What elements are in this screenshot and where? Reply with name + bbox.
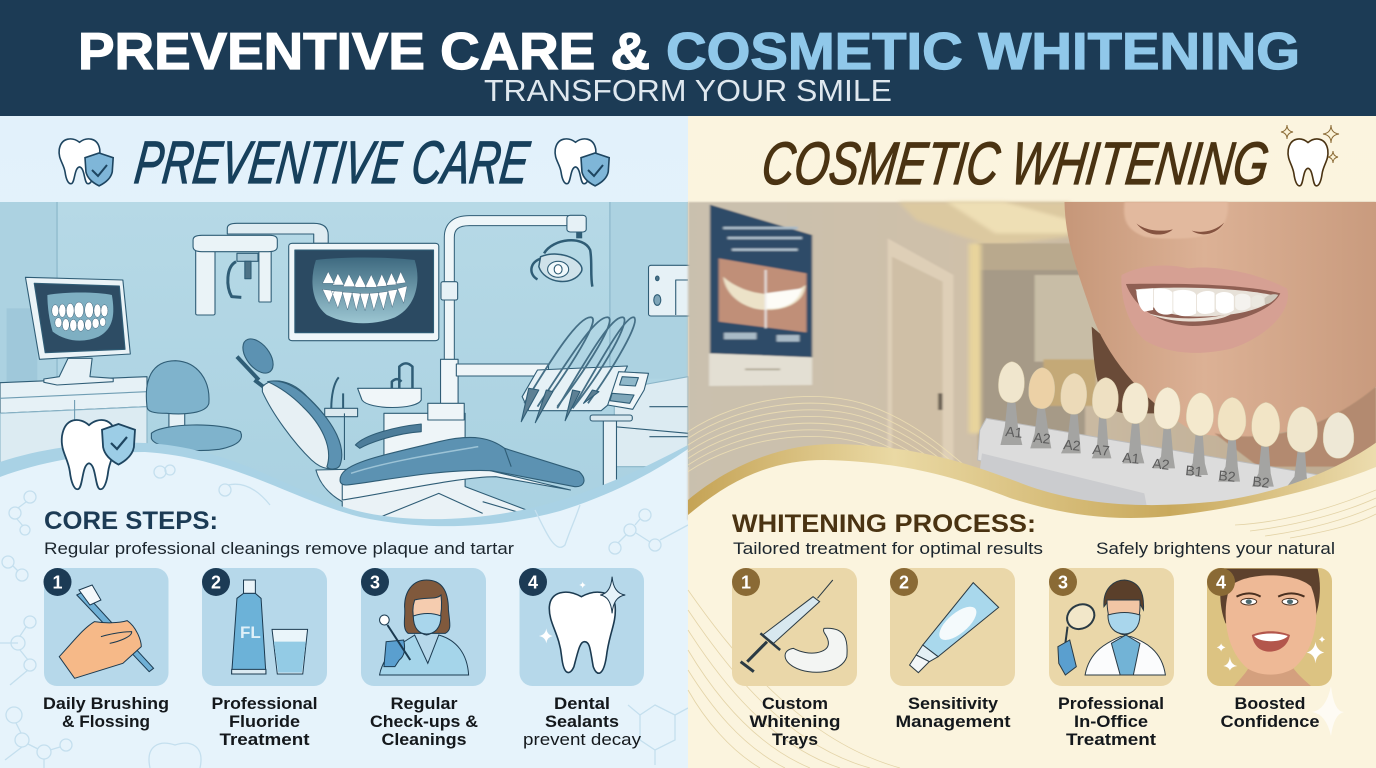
icon: smiling woman xyxy=(1217,569,1325,686)
label: Sensitivity xyxy=(908,694,999,713)
shade guide labels: A2 xyxy=(1152,455,1171,473)
text: whitening intro right: Safely brightens your natural xyxy=(1096,539,1335,558)
label: Whitening xyxy=(750,712,840,731)
shade guide labels: A1 xyxy=(1122,449,1141,467)
arm and delivery tray xyxy=(441,317,649,493)
badge 4: 4 xyxy=(1216,572,1226,592)
label xyxy=(370,694,478,749)
icon: toothbrush and hand xyxy=(59,585,154,678)
panoramic x-ray unit xyxy=(193,223,328,315)
icon: tooth with shield on scene xyxy=(62,420,135,489)
badge 4: 4 xyxy=(528,572,538,592)
monitor with dental scan xyxy=(25,277,130,385)
badge 1 xyxy=(44,568,72,596)
label: Boosted xyxy=(1234,694,1306,713)
shade guide labels: A7 xyxy=(1092,441,1111,459)
badge 3 xyxy=(361,568,389,596)
label: Treatment xyxy=(1066,730,1156,749)
badge 4 xyxy=(1207,568,1235,596)
badge 3: 3 xyxy=(370,572,380,592)
photo: whitening clinic and smile xyxy=(688,202,1376,520)
shade guide labels: A1 xyxy=(1005,423,1024,441)
lamp arm xyxy=(441,215,592,363)
title: PREVENTIVE CARE & xyxy=(78,23,650,81)
clinic background xyxy=(688,202,1376,520)
step 3: in-office xyxy=(1049,568,1174,749)
decorative gold lines: whitening xyxy=(688,490,1376,768)
badge 4 xyxy=(519,568,547,596)
panel: preventive care background xyxy=(0,116,688,768)
dental chair xyxy=(237,335,584,530)
nose xyxy=(1124,202,1228,239)
label xyxy=(1220,694,1320,731)
title xyxy=(78,23,1300,81)
badge 2 xyxy=(890,568,918,596)
gold wave band xyxy=(688,443,1376,520)
badge 2: 2 xyxy=(211,572,221,592)
sparkle watermark xyxy=(1312,686,1344,736)
lower panel wave: preventive xyxy=(0,449,688,768)
header bar xyxy=(0,0,1376,116)
badge 3 xyxy=(1049,568,1077,596)
icon: tooth with shield, left xyxy=(59,139,113,186)
label xyxy=(896,694,1011,731)
shade guide labels: B1 xyxy=(1185,462,1204,480)
illustration: dental operatory xyxy=(0,202,692,533)
badge 2: 2 xyxy=(899,572,909,592)
shade guide labels xyxy=(1005,423,1271,491)
step 3: check-ups xyxy=(361,568,486,749)
step 4: confidence xyxy=(1207,568,1332,731)
panel: cosmetic whitening background xyxy=(688,116,1376,768)
icon: dentist with light xyxy=(1058,580,1165,675)
label: prevent decay xyxy=(523,730,642,749)
label: Regular xyxy=(390,694,458,713)
stool xyxy=(146,361,241,451)
icon: fluoride tube and glass xyxy=(232,580,308,674)
step 1: trays xyxy=(732,568,857,749)
label: Daily Brushing xyxy=(43,694,169,713)
label: Confidence xyxy=(1220,712,1320,731)
subtitle: TRANSFORM YOUR SMILE xyxy=(484,73,892,108)
icon: sensitivity gel tube xyxy=(910,583,999,673)
label xyxy=(750,694,840,749)
shade guide labels: B2 xyxy=(1252,473,1271,491)
label: Dental xyxy=(554,694,610,713)
label: Check-ups & xyxy=(370,712,478,731)
label: & Flossing xyxy=(62,712,150,731)
text: whitening intro left: Tailored treatment for optimal results xyxy=(733,539,1043,558)
label: Professional xyxy=(212,694,318,713)
icon: sparkling tooth xyxy=(539,577,625,673)
label: Management xyxy=(896,712,1011,731)
label: Professional xyxy=(1058,694,1164,713)
heading: whitening process: WHITENING PROCESS: xyxy=(732,510,1036,538)
shade guide labels: A2 xyxy=(1033,429,1052,447)
icon: dentist with mirror xyxy=(380,580,469,675)
label xyxy=(43,694,169,731)
wave band: preventive xyxy=(0,443,688,768)
decorative gold arcs over photo xyxy=(688,396,978,517)
heading: core steps: CORE STEPS: xyxy=(44,507,218,535)
label xyxy=(212,694,318,749)
title: COSMETIC WHITENING xyxy=(666,23,1300,81)
step 1: daily brushing xyxy=(43,568,169,731)
badge 1: 1 xyxy=(52,572,63,592)
shade guide xyxy=(978,362,1354,520)
badge 3: 3 xyxy=(1058,572,1068,592)
water unit xyxy=(325,363,465,467)
step 2: fluoride xyxy=(202,568,327,749)
heading: preventive care: PREVENTIVE CARE xyxy=(131,128,533,196)
step 4: sealants xyxy=(519,568,644,749)
label xyxy=(1058,694,1164,749)
text: core steps intro: Regular professional cleanings remove plaque and tartar xyxy=(44,539,514,558)
badge 1 xyxy=(732,568,760,596)
icon: tooth with shield, right xyxy=(555,139,609,186)
badge 2 xyxy=(202,568,230,596)
step 2: sensitivity xyxy=(890,568,1015,731)
label: Sealants xyxy=(545,712,619,731)
hair xyxy=(1092,327,1171,413)
label: Cleanings xyxy=(382,730,466,749)
smile xyxy=(1121,265,1288,353)
icon: syringe and tray xyxy=(741,580,847,672)
x-ray monitor xyxy=(289,243,439,341)
label: In-Office xyxy=(1074,712,1148,731)
decorative molecules: preventive xyxy=(0,465,688,768)
label: Custom xyxy=(762,694,828,713)
wall dispenser xyxy=(649,265,692,316)
label: Fluoride xyxy=(229,712,300,731)
icon: sparkling tooth xyxy=(1281,125,1339,186)
label: Trays xyxy=(772,730,818,749)
icon: fluoride tube and glass: FL xyxy=(240,623,261,642)
label xyxy=(523,694,642,749)
lower panel wave: whitening xyxy=(688,460,1376,768)
shade guide labels: B2 xyxy=(1218,467,1237,485)
badge 1: 1 xyxy=(741,572,751,592)
label: Treatment xyxy=(220,730,310,749)
face xyxy=(1064,202,1376,437)
shade guide labels: A2 xyxy=(1063,436,1082,454)
